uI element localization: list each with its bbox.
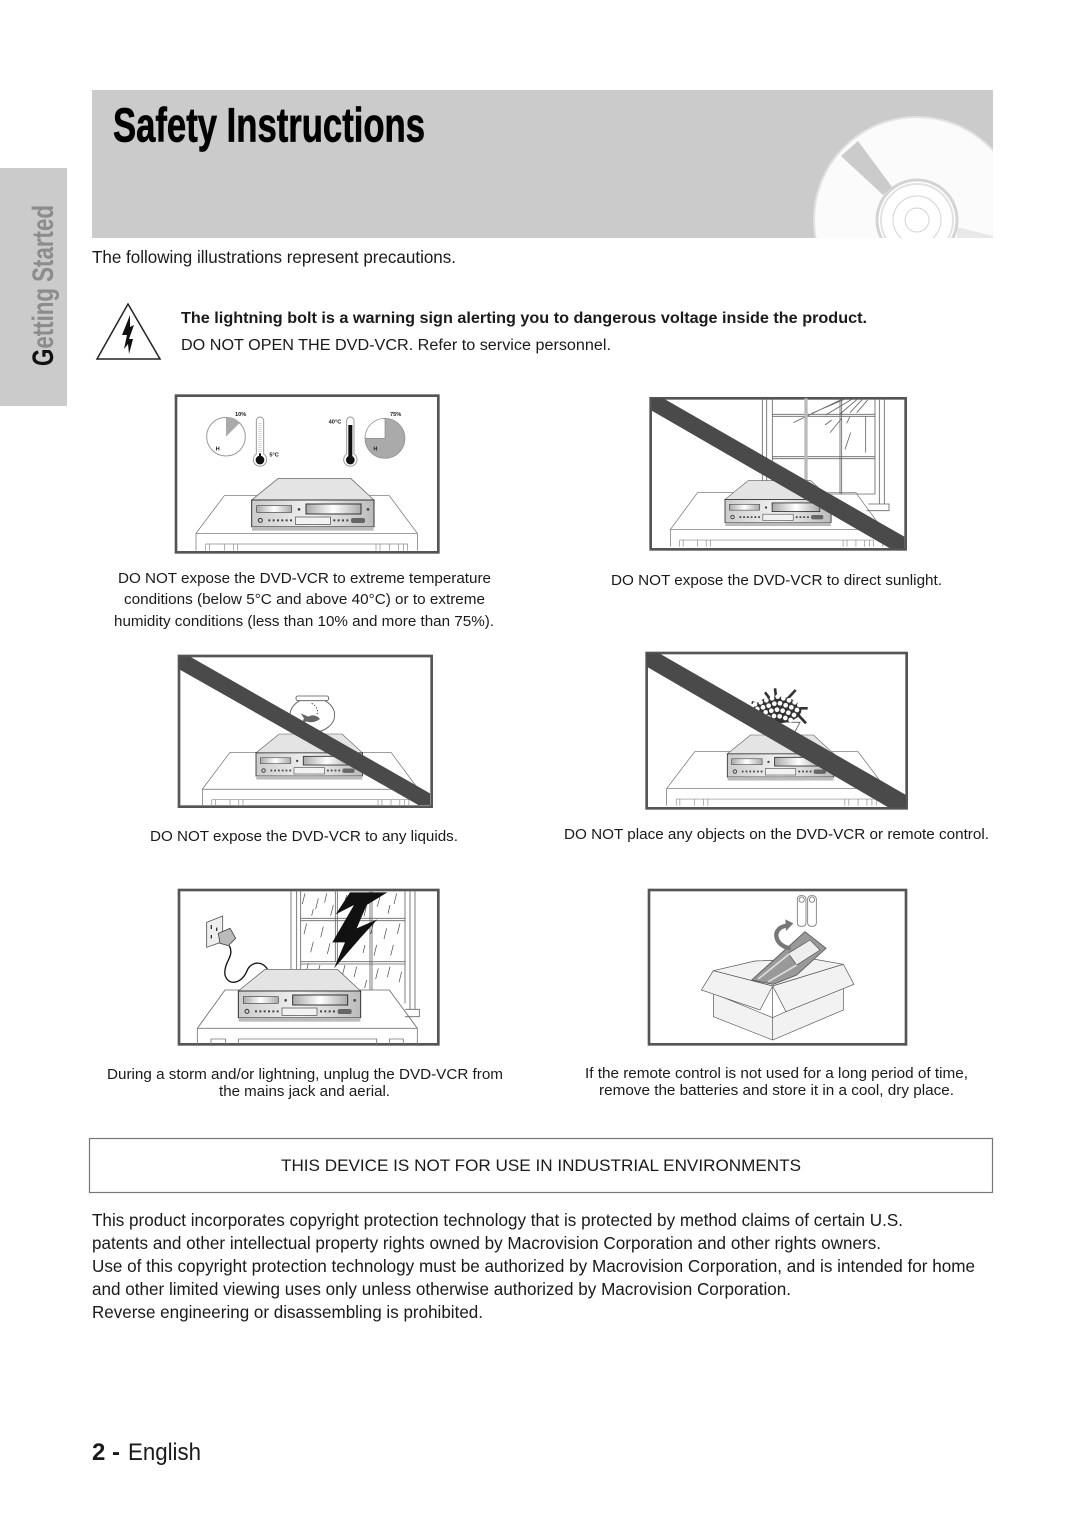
icon: lightning bolt <box>332 892 387 968</box>
icon: batteries <box>797 896 816 926</box>
copyright paragraph: Reverse engineering or disassembling is prohibited. <box>92 1302 483 1322</box>
caption: temperature: conditions (below 5°C and above 40°C) or to extreme <box>124 591 485 608</box>
prohibition bar <box>647 653 906 807</box>
warning text: The lightning bolt is a warning sign alerting you to dangerous voltage inside the product. <box>181 310 867 327</box>
icon: fish bowl <box>290 696 335 732</box>
sidebar tab: Getting Started <box>0 168 67 406</box>
page number: English <box>128 1439 201 1466</box>
caption: storm: the mains jack and aerial. <box>219 1083 390 1100</box>
icon: low humidity pie: H <box>216 447 220 453</box>
intro text: The following illustrations represent precautions. <box>92 247 456 267</box>
icon: high humidity pie: H <box>373 447 377 453</box>
notice box <box>90 1138 992 1192</box>
title: Safety Instructions <box>113 100 425 152</box>
icon: low temperature thermometer <box>253 417 279 466</box>
copyright paragraph <box>92 1210 975 1322</box>
caption: sunlight: DO NOT expose the DVD-VCR to direct sunlight. <box>611 572 942 589</box>
caption: storm: During a storm and/or lightning, unplug the DVD-VCR from <box>107 1066 503 1083</box>
notice box: THIS DEVICE IS NOT FOR USE IN INDUSTRIAL ENVIRONMENTS <box>281 1156 801 1175</box>
caption: batteries <box>585 1065 968 1099</box>
icon: low temperature thermometer: 5°C <box>269 453 279 459</box>
caption: batteries: If the remote control is not used for a long period of time, <box>585 1065 968 1082</box>
copyright paragraph: This product incorporates copyright protection technology that is protected by method claims of certain U.S. <box>92 1210 903 1230</box>
icon: low humidity pie: 10% <box>235 412 246 418</box>
icon: high temperature thermometer: 40°C <box>329 419 341 425</box>
page number: 2 - <box>92 1439 120 1466</box>
icon: high humidity pie <box>365 412 405 458</box>
caption: liquids: DO NOT expose the DVD-VCR to any liquids. <box>150 828 458 845</box>
page number <box>92 1439 201 1466</box>
copyright paragraph: and other limited viewing uses only unless otherwise authorized by Macrovision Corporation. <box>92 1279 791 1299</box>
icon: flower vase <box>752 688 808 742</box>
panel: direct sunlight <box>651 398 906 549</box>
panel: liquids <box>179 656 432 807</box>
icon: low humidity pie <box>207 412 246 456</box>
icon: cardboard box <box>701 964 854 1040</box>
icon: high humidity pie: 75% <box>390 412 401 418</box>
panel: temperature and humidity <box>176 396 438 552</box>
caption: temperature: DO NOT expose the DVD-VCR to extreme temperature <box>118 570 491 587</box>
panel: batteries and box <box>649 890 906 1044</box>
warning text <box>181 310 867 354</box>
icon: lightning warning triangle <box>97 304 160 359</box>
caption: objects: DO NOT place any objects on the DVD-VCR or remote control. <box>564 826 989 843</box>
icon: wall socket and plug <box>207 916 267 982</box>
icon: curved arrow <box>776 919 793 948</box>
panel: objects on top <box>647 653 907 808</box>
panel: storm and lightning <box>179 890 438 1044</box>
icon: box back flaps <box>713 959 843 986</box>
header band <box>92 90 993 238</box>
prohibition bar <box>652 398 904 548</box>
copyright paragraph: Use of this copyright protection technology must be authorized by Macrovision Corporation, and is intended for home <box>92 1256 975 1276</box>
caption: temperature: humidity conditions (less than 10% and more than 75%). <box>114 613 494 630</box>
warning text: DO NOT OPEN THE DVD-VCR. Refer to service personnel. <box>181 337 611 354</box>
caption: storm <box>107 1066 503 1100</box>
copyright paragraph: patents and other intellectual property rights owned by Macrovision Corporation and other rights owners. <box>92 1233 881 1253</box>
prohibition bar <box>179 657 430 805</box>
icon: remote control <box>752 932 826 984</box>
icon: high temperature thermometer <box>329 417 357 466</box>
icon: compact disc <box>813 116 993 238</box>
caption: temperature <box>114 570 494 630</box>
sidebar tab: Getting Started: Getting Started <box>27 205 60 366</box>
icon: DVD-VCR <box>252 478 374 531</box>
caption: batteries: remove the batteries and store it in a cool, dry place. <box>599 1082 954 1099</box>
